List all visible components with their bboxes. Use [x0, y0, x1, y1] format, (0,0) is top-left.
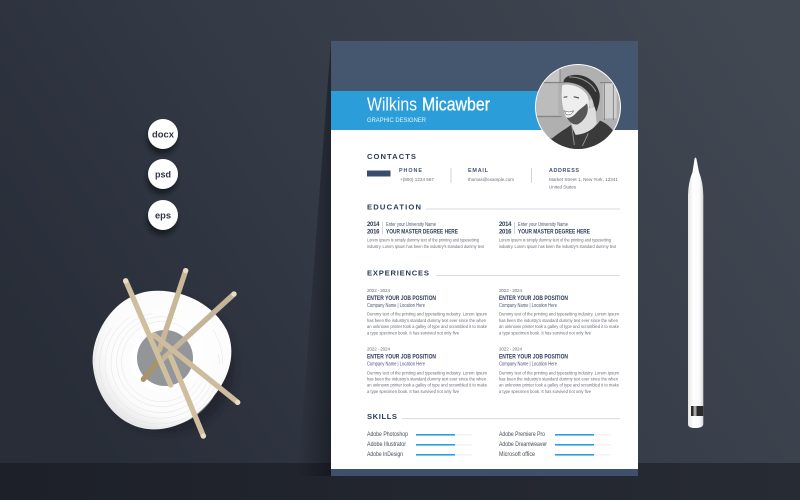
- icon: white stylus pencil: [688, 158, 703, 428]
- education entry right: [499, 222, 617, 249]
- heading: skills: SKILLS: [367, 412, 397, 421]
- job entry bottom right: a type specimen book. It has survived not only five: [499, 389, 591, 394]
- job entry bottom left: Dummy text of the printing and typesetting industry. Lorem Ipsum: [367, 370, 487, 375]
- job entry top left: an unknown printer took a galley of type and scrambled it to make: [367, 324, 487, 329]
- skill: Adobe Photoshop: Adobe Photoshop: [367, 432, 409, 438]
- skill: Microsoft office: [499, 452, 611, 458]
- job entry top right: [499, 288, 619, 336]
- contact: email: EMAIL: [468, 168, 489, 174]
- title: name: Wilkins: [367, 94, 417, 114]
- job entry top right: Company Name | Location Here: [499, 303, 557, 309]
- education entry right: Lorem Ipsum is simply dummy text of the printing and typesetting: [499, 238, 611, 242]
- job entry bottom right: an unknown printer took a galley of type and scrambled it to make: [499, 383, 619, 388]
- job entry bottom left: an unknown printer took a galley of type and scrambled it to make: [367, 383, 487, 388]
- pencil metal band: [691, 406, 703, 416]
- job entry top right: a type specimen book. It has survived not only five: [499, 330, 591, 336]
- contact: address: [549, 168, 618, 190]
- skill: Adobe Illustrator: [367, 442, 472, 448]
- job entry bottom right: Dummy text of the printing and typesetting industry. Lorem Ipsum: [499, 370, 619, 375]
- panel: header band: [331, 41, 638, 130]
- education entry right: industry. Lorem Ipsum has been the industry's standard dummy text: [499, 244, 617, 249]
- section: education: [367, 202, 620, 249]
- icon: file format badges: [147, 119, 178, 235]
- job entry bottom left: [367, 347, 487, 394]
- hair: [564, 75, 600, 112]
- education entry left: 2016: [367, 230, 380, 236]
- job entry bottom right: 2022 - 2024: [499, 347, 522, 352]
- job entry bottom right: [499, 347, 619, 394]
- section: experiences: [367, 268, 620, 394]
- beard: [566, 103, 588, 124]
- skill: Adobe Illustrator: Adobe Illustrator: [367, 442, 406, 448]
- education entry right: Enter your University Name: [518, 222, 568, 228]
- contact: email: thomas@example.com: [468, 177, 514, 182]
- education entry left: 2014: [367, 222, 380, 228]
- skill: Adobe Premiere Pro: Adobe Premiere Pro: [499, 432, 546, 438]
- job entry top left: has been the industry's standard dummy text ever since the when: [367, 318, 486, 323]
- portrait photo: [535, 64, 621, 149]
- section: contacts: [367, 152, 618, 190]
- job entry bottom right: Company Name | Location Here: [499, 362, 557, 368]
- wooden sticks: [126, 271, 238, 436]
- job entry bottom left: 2022 - 2024: [367, 347, 390, 352]
- job entry top right: an unknown printer took a galley of type and scrambled it to make: [499, 324, 619, 329]
- contact: address: ADDRESS: [549, 168, 579, 174]
- skill: Adobe InDesign: Adobe InDesign: [367, 452, 403, 458]
- section: skills: [367, 412, 620, 458]
- badge: docx: docx: [152, 129, 175, 140]
- footer band: [331, 469, 638, 476]
- education entry left: Lorem Ipsum is simply dummy text of the printing and typesetting: [367, 238, 479, 242]
- skill: Microsoft office: Microsoft office: [499, 452, 536, 458]
- skill: Adobe Photoshop: [367, 432, 472, 438]
- skill: Adobe InDesign: [367, 452, 472, 458]
- smile: [564, 111, 574, 115]
- neck: [571, 107, 597, 135]
- education entry left: Enter your University Name: [386, 222, 436, 228]
- face: [562, 85, 589, 124]
- job entry bottom left: has been the industry's standard dummy text ever since the when: [367, 376, 486, 382]
- contact: email: [468, 168, 514, 182]
- heading: experiences: EXPERIENCES: [367, 268, 429, 278]
- job entry top left: a type specimen book. It has survived not only five: [367, 330, 459, 336]
- sweater: [551, 120, 613, 149]
- job entry bottom left: Company Name | Location Here: [367, 362, 425, 368]
- eyes and brows: [564, 97, 579, 98]
- job entry top right: 2022 - 2024: [499, 288, 522, 293]
- job entry bottom right: has been the industry's standard dummy text ever since the when: [499, 376, 618, 382]
- education entry left: [367, 222, 485, 249]
- job entry bottom left: a type specimen book. It has survived not only five: [367, 389, 459, 394]
- education entry right: 2016: [499, 230, 512, 236]
- job entry top right: Dummy text of the printing and typesetting industry. Lorem Ipsum: [499, 312, 619, 317]
- education entry left: YOUR MASTER DEGREE HERE: [386, 230, 458, 236]
- badge: eps: eps: [155, 210, 171, 221]
- job entry top left: Company Name | Location Here: [367, 303, 425, 309]
- education entry right: YOUR MASTER DEGREE HERE: [518, 230, 590, 236]
- ear: [589, 99, 593, 108]
- job entry top right: has been the industry's standard dummy text ever since the when: [499, 318, 618, 323]
- skill: Adobe Dreamweaver: Adobe Dreamweaver: [499, 442, 547, 448]
- job entry top left: ENTER YOUR JOB POSITION: [367, 296, 436, 302]
- badge: psd: psd: [155, 169, 171, 180]
- job entry top left: [367, 288, 487, 336]
- panel: header band: Micawber: [422, 94, 490, 114]
- job entry top left: Dummy text of the printing and typesetting industry. Lorem Ipsum: [367, 312, 487, 317]
- skill: Adobe Dreamweaver: [499, 442, 611, 448]
- heading: education: EDUCATION: [367, 202, 421, 212]
- icon: contact bar: [367, 170, 390, 176]
- job entry top left: 2022 - 2024: [367, 288, 390, 293]
- contact: phone: PHONE: [399, 168, 422, 174]
- contact: phone: [399, 168, 434, 182]
- education entry right: 2014: [499, 222, 512, 228]
- job entry bottom left: ENTER YOUR JOB POSITION: [367, 354, 436, 360]
- resume paper: [298, 41, 638, 476]
- job title: GRAPHIC DESIGNER: [367, 117, 426, 124]
- skill: Adobe Premiere Pro: [499, 432, 611, 438]
- icon: white vase with wooden sticks: [93, 268, 240, 439]
- job entry bottom right: ENTER YOUR JOB POSITION: [499, 354, 568, 360]
- job entry top right: ENTER YOUR JOB POSITION: [499, 296, 568, 302]
- contact: address: United States: [549, 184, 577, 190]
- education entry left: industry. Lorem Ipsum has been the industry's standard dummy text: [367, 244, 485, 249]
- heading: contacts: CONTACTS: [367, 152, 416, 161]
- contact: address: Market Street 1, New York, 12341: [549, 177, 618, 182]
- contact: phone: +(800) 1234 567: [400, 177, 434, 182]
